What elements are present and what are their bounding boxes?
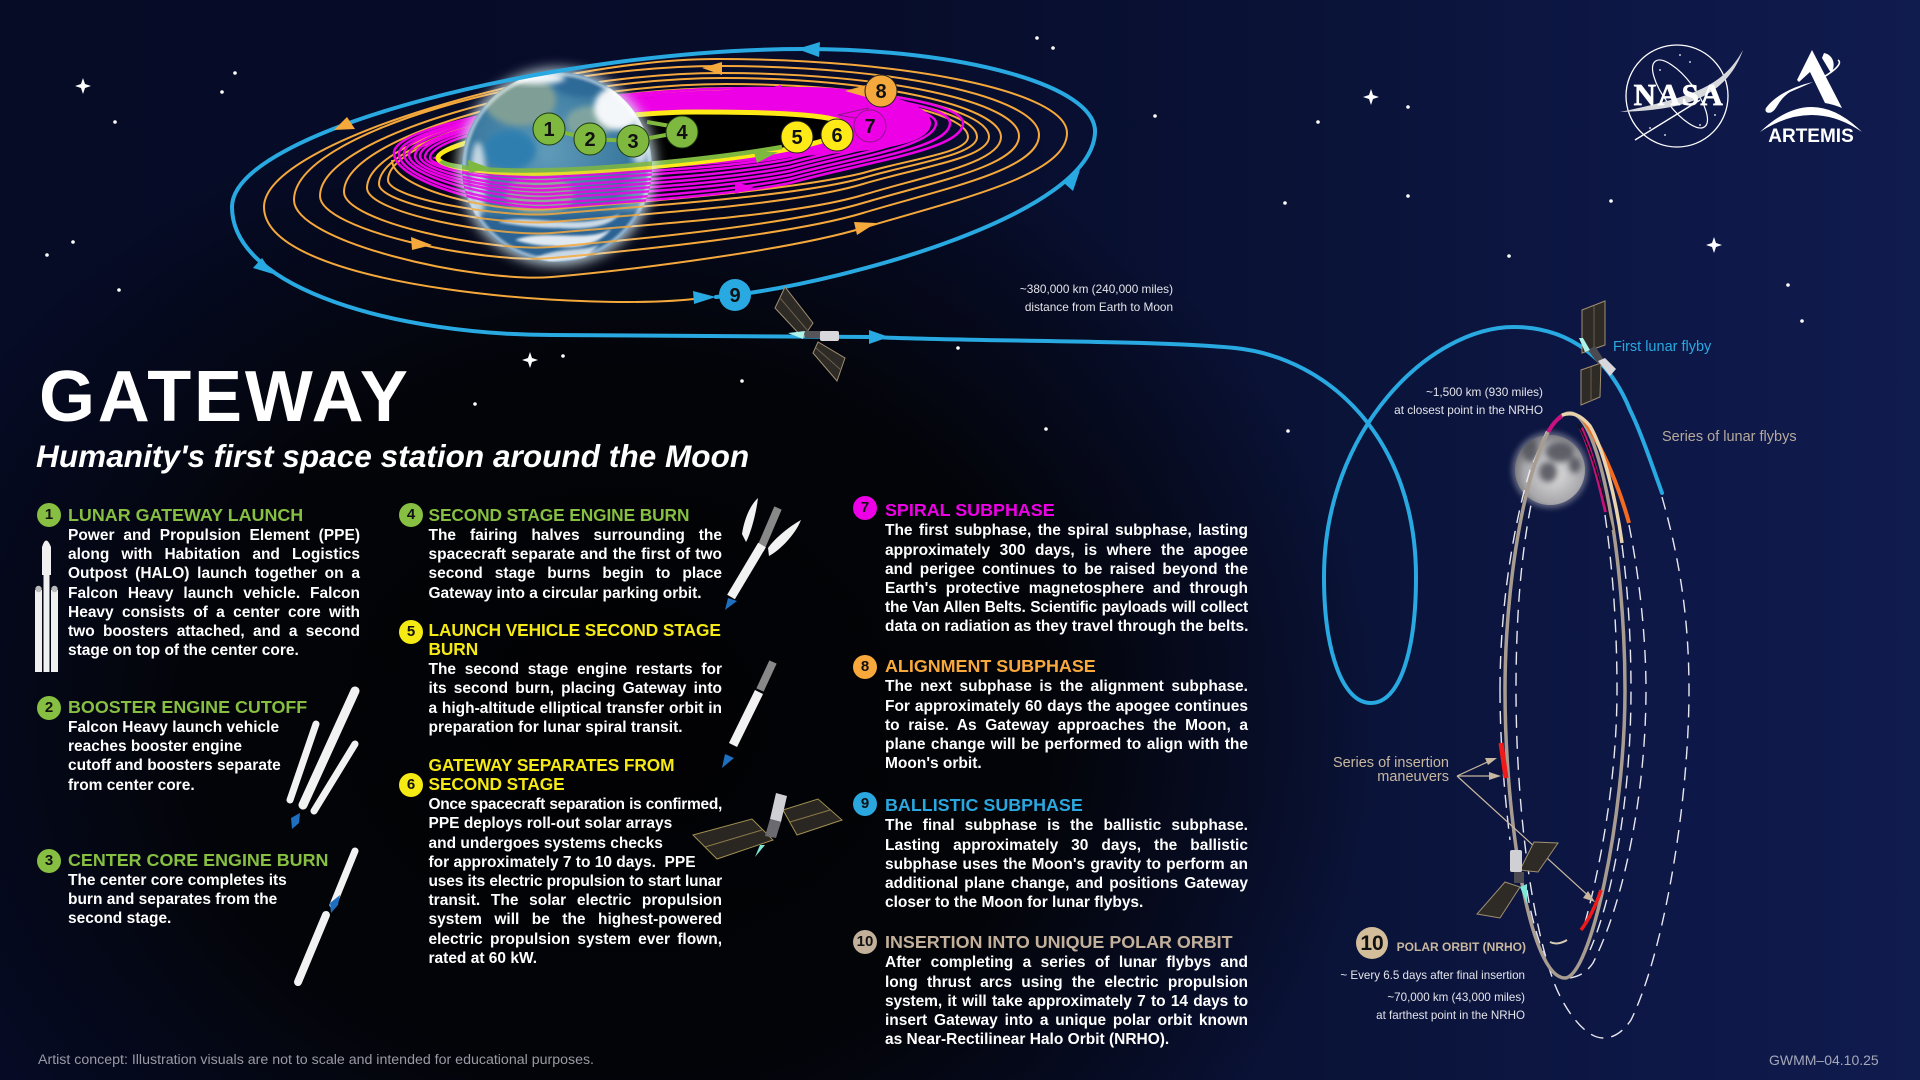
text: 9: [861, 795, 869, 812]
panel: step 1 lunar gateway launch: Falcon Heavy launch vehicle. Falcon: [68, 585, 360, 602]
panel: step 10 insertion into unique polar orbit: After completing a series of lunar flybys and: [885, 954, 1248, 971]
panel: step 9 ballistic subphase: BALLISTIC SUBPHASE: [885, 795, 1083, 815]
flight path: ballistic subphase and transfer to the Moon: [232, 49, 1662, 703]
panel: step 1 lunar gateway launch: Heavy consists of a center core with: [68, 604, 360, 621]
panel: step 4 second stage engine burn: second stage burns begin to place: [428, 565, 722, 582]
panel: step 1 lunar gateway launch: stage on top of the center core.: [68, 642, 299, 659]
flyby labels: Series of lunar flybys: [1662, 429, 1797, 445]
flyby labels: [1333, 339, 1797, 785]
NASA logo: [1620, 45, 1743, 147]
panel: step 8 alignment subphase: to raise. As Gateway approaches the Moon, a: [885, 717, 1248, 734]
polar orbit callout: 10: [1360, 932, 1384, 955]
panel: step 8 alignment subphase: The next subphase is the alignment subphase.: [885, 678, 1248, 695]
panel: step 6 gateway separates from second stage: uses its electric propulsion to start lunar: [428, 873, 722, 890]
orbit number badges 1 to 9: 5: [791, 127, 803, 149]
panel: step 8 alignment subphase: Moon's orbit.: [885, 755, 982, 772]
panel: step 7 spiral subphase: data on radiation as they travel through the belts.: [885, 618, 1248, 635]
panel: step 3 center core engine burn: burn and separates from the: [68, 891, 277, 908]
panel: step 2 booster engine cutoff: reaches booster engine: [68, 738, 242, 755]
panel: step 3 center core engine burn: The center core completes its: [68, 872, 287, 889]
spacecraft in polar orbit: [1477, 842, 1558, 918]
icon: second stage burn: [722, 662, 773, 768]
panel: step 5 launch vehicle second stage burn: preparation for lunar spiral transit.: [428, 719, 683, 736]
panel: step 10 insertion into unique polar orbit: insert Gateway into a unique polar orbit known: [885, 1012, 1248, 1029]
panel: step 7 spiral subphase: SPIRAL SUBPHASE: [885, 500, 1055, 520]
panel: step 9 ballistic subphase: additional plane change, and positions Gateway: [885, 875, 1248, 892]
arrow on transfer path: [869, 330, 889, 344]
panel: step 10 insertion into unique polar orbit: as Near-Rectilinear Halo Orbit (NRHO).: [885, 1031, 1169, 1048]
maneuver arrows: [1457, 758, 1595, 902]
panel: step 5 launch vehicle second stage burn: BURN: [428, 639, 478, 659]
panel: step 1 lunar gateway launch: LUNAR GATEWAY LAUNCH: [68, 505, 303, 525]
spacecraft on transfer path: [775, 287, 845, 381]
magenta band and black parking orbit interior: [432, 87, 931, 173]
footer disclaimer: Artist concept: Illustration visuals are not to scale and intended for educational purposes.: [38, 1052, 594, 1068]
text: 5: [407, 623, 415, 640]
text: 1: [45, 506, 53, 523]
panel: step 9 ballistic subphase: The final subphase is the ballistic subphase.: [885, 817, 1248, 834]
polar orbit callout: ~ Every 6.5 days after final insertion: [1340, 969, 1525, 982]
panel: step 10 insertion into unique polar orbit: INSERTION INTO UNIQUE POLAR ORBIT: [885, 932, 1233, 952]
flyby labels: First lunar flyby: [1613, 339, 1712, 355]
panel: step 1 lunar gateway launch: two boosters attached, and a second: [68, 623, 360, 640]
panel: step 7 spiral subphase: Earth's protective magnetosphere and through: [885, 580, 1248, 597]
orbit number badges 1 to 9: 9: [729, 285, 741, 307]
panel: step 7 spiral subphase: approximately 300 days, is where the apogee: [885, 542, 1248, 559]
text: 2: [45, 699, 53, 716]
panel: step 6 gateway separates from second stage: electric propulsion system ever flown,: [428, 931, 722, 948]
flyby labels: maneuvers: [1377, 769, 1449, 785]
orbit number badges 1 to 9: 1: [543, 119, 555, 141]
distance label: distance from Earth to Moon: [1025, 300, 1173, 314]
flyby labels: Series of insertion: [1333, 755, 1449, 771]
panel: step 9 ballistic subphase: subphase uses the Moon's gravity to perform an: [885, 856, 1248, 873]
panel: step 5 launch vehicle second stage burn: its second burn, placing Gateway into: [428, 680, 722, 697]
panel: step 6 gateway separates from second stage: PPE deploys roll-out solar arrays: [428, 815, 672, 832]
icon: deployed Gateway spacecraft: [693, 793, 842, 859]
panel: step 4 second stage engine burn: spacecraft separate and the first of two: [428, 546, 722, 563]
title: GATEWAY: [39, 357, 411, 437]
magenta spiral and parking orbit rings: [394, 88, 963, 207]
panel: step 5 launch vehicle second stage burn: LAUNCH VEHICLE SECOND STAGE: [428, 620, 721, 640]
panel: step 2 booster engine cutoff: Falcon Heavy launch vehicle: [68, 719, 279, 736]
NASA logo: NASA: [1634, 77, 1724, 112]
panel: step 6 gateway separates from second stage: GATEWAY SEPARATES FROM: [428, 755, 674, 775]
Artemis logo: ARTEMIS: [1768, 126, 1854, 147]
subtitle: Humanity's first space station around the Moon: [36, 438, 749, 474]
closest point label: ~1,500 km (930 miles): [1426, 385, 1543, 399]
polar orbit callout: [1340, 927, 1526, 1022]
panel: step 8 alignment subphase: For approximately 60 days the apogee continues: [885, 698, 1248, 715]
panel: step 6 gateway separates from second stage: transit. The solar electric propulsion: [428, 892, 722, 909]
panel: step 2 booster engine cutoff: [37, 696, 307, 794]
panel: step 4 second stage engine burn: [399, 503, 722, 602]
orange spiral: alignment subphase: [264, 59, 1067, 302]
panel: step 1 lunar gateway launch: Outpost (HALO) launch together on a: [68, 565, 360, 582]
panel: step 6 gateway separates from second stage: [399, 755, 722, 967]
text: 3: [45, 852, 53, 869]
panel: step 2 booster engine cutoff: BOOSTER ENGINE CUTOFF: [68, 697, 307, 717]
panel: step 5 launch vehicle second stage burn: a high-altitude elliptical transfer orbit in: [428, 700, 722, 717]
orbit number badges 1 to 9: [533, 75, 897, 311]
panel: step 3 center core engine burn: CENTER CORE ENGINE BURN: [68, 850, 328, 870]
panel: step 4 second stage engine burn: SECOND STAGE ENGINE BURN: [428, 505, 689, 525]
panel: step 6 gateway separates from second stage: Once spacecraft separation is confirmed,: [428, 796, 722, 813]
panel: step 6 gateway separates from second stage: SECOND STAGE: [428, 774, 565, 794]
orbit number badges 1 to 9: 4: [676, 122, 688, 144]
orbit number badges 1 to 9: 6: [831, 125, 843, 147]
panel: step 6 gateway separates from second stage: system will be the highest-powered: [428, 911, 722, 928]
rings passing in front of Earth: [462, 161, 652, 260]
icon: boosters separating: [290, 691, 355, 829]
text: 8: [861, 658, 869, 675]
document code: GWMM–04.10.25: [1769, 1052, 1879, 1068]
panel: step 7 spiral subphase: the Van Allen Belts. Scientific payloads will collect: [885, 599, 1248, 616]
panel: step 10 insertion into unique polar orbit: system, it will take approximately 7 to 14 days to: [885, 993, 1248, 1010]
distance label: ~380,000 km (240,000 miles): [1020, 282, 1173, 296]
panel: step 2 booster engine cutoff: cutoff and boosters separate: [68, 757, 281, 774]
panel: step 8 alignment subphase: ALIGNMENT SUBPHASE: [885, 656, 1096, 676]
panel: step 6 gateway separates from second stage: rated at 60 kW.: [428, 950, 537, 967]
panel: step 6 gateway separates from second stage: for approximately 7 to 10 days. PPE: [428, 854, 696, 871]
panel: step 9 ballistic subphase: closer to the Moon for lunar flybys.: [885, 894, 1143, 911]
polar orbit callout: POLAR ORBIT (NRHO): [1397, 940, 1526, 954]
icon: center core separation: [298, 851, 355, 982]
orbit number badges 1 to 9: 3: [627, 131, 639, 153]
Artemis logo: [1760, 50, 1862, 147]
panel: step 4 second stage engine burn: The fairing halves surrounding the: [428, 527, 722, 544]
panel: step 8 alignment subphase: [853, 655, 1248, 772]
panel: step 9 ballistic subphase: Lasting approximately 30 days, the ballistic: [885, 837, 1248, 854]
panel: step 8 alignment subphase: plane change will be performed to align with the: [885, 736, 1248, 753]
panel: step 10 insertion into unique polar orbit: long thrust arcs using the electric propulsion: [885, 974, 1248, 991]
panel: step 1 lunar gateway launch: [37, 503, 360, 659]
polar orbit callout: ~70,000 km (43,000 miles): [1387, 991, 1525, 1004]
panel: step 1 lunar gateway launch: Power and Propulsion Element (PPE): [68, 527, 360, 544]
text: 4: [407, 506, 415, 523]
green connector between badges 1 to 4: [549, 122, 682, 141]
panel: step 4 second stage engine burn: Gateway into a circular parking orbit.: [428, 585, 702, 602]
panel: step 5 launch vehicle second stage burn: [399, 620, 722, 736]
NRHO orbit tracks: [1500, 413, 1689, 1038]
panel: step 7 spiral subphase: The first subphase, the spiral subphase, lasting: [885, 522, 1248, 539]
icon: fairing separation: [725, 498, 801, 610]
orbit number badges 1 to 9: 8: [875, 81, 887, 103]
panel: step 1 lunar gateway launch: along with Habitation and Logistics: [68, 546, 360, 563]
closest point label: at closest point in the NRHO: [1394, 403, 1543, 417]
panel: step 7 spiral subphase: [853, 496, 1248, 635]
stars: [45, 36, 1804, 433]
panel: step 5 launch vehicle second stage burn: The second stage engine restarts for: [428, 661, 722, 678]
text: 7: [861, 499, 869, 516]
orbit number badges 1 to 9: 2: [584, 129, 596, 151]
polar orbit callout: at farthest point in the NRHO: [1376, 1009, 1525, 1022]
orbit number badges 1 to 9: 7: [864, 116, 876, 138]
panel: step 3 center core engine burn: [37, 849, 328, 927]
panel: step 7 spiral subphase: and perigee continues to be raised beyond the: [885, 561, 1248, 578]
panel: step 9 ballistic subphase: [853, 792, 1248, 911]
panel: step 2 booster engine cutoff: from center core.: [68, 777, 195, 794]
panel: step 10 insertion into unique polar orbit: [853, 930, 1248, 1048]
panel: step 3 center core engine burn: second stage.: [68, 910, 171, 927]
text: 6: [407, 776, 415, 793]
spacecraft at first lunar flyby: [1579, 301, 1616, 405]
text: 10: [857, 933, 873, 950]
Earth: [458, 68, 660, 270]
orbit direction arrows: [253, 42, 1080, 304]
panel: step 6 gateway separates from second stage: and undergoes systems checks: [428, 835, 663, 852]
Moon: [1512, 432, 1588, 508]
icon: Falcon Heavy on the pad: [35, 540, 58, 672]
